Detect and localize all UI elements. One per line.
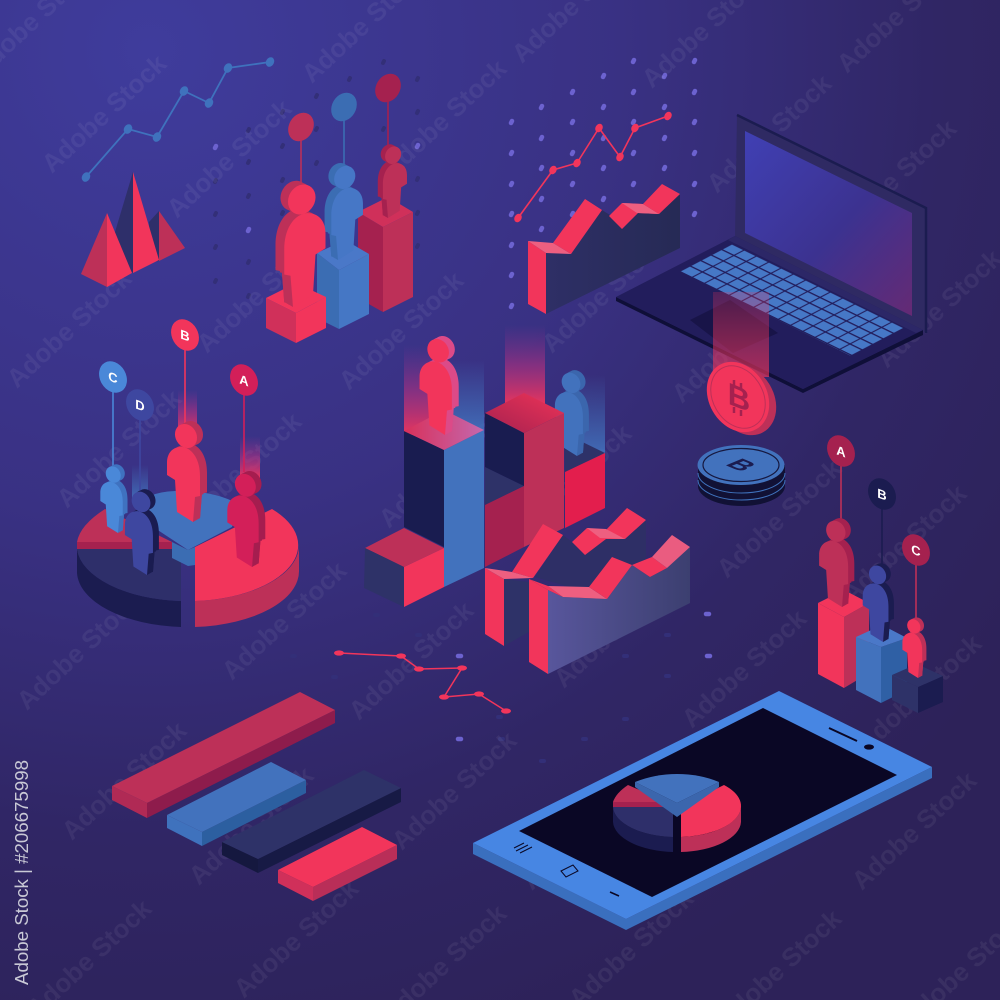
bar 3 xyxy=(222,770,401,873)
line chart: red, lower center xyxy=(334,650,511,714)
watermark: Adobe Stock xyxy=(11,585,148,716)
laptop screen xyxy=(745,131,912,316)
front chart xyxy=(529,535,690,674)
glow: blue beside left person xyxy=(445,360,484,432)
phone speaker and camera xyxy=(829,728,874,750)
person B with pin xyxy=(165,314,207,522)
laptop lid xyxy=(735,115,926,333)
watermark: Adobe Stock xyxy=(386,725,523,856)
watermark: Adobe Stock xyxy=(836,478,973,609)
phone buttons xyxy=(514,843,619,896)
person B with pin: B xyxy=(180,327,190,345)
dot grid: purple dots xyxy=(215,60,710,739)
line chart: blue, top left xyxy=(80,56,276,183)
person: red on tall block xyxy=(420,332,459,435)
person B with pin xyxy=(862,473,902,642)
glow: red above middle column xyxy=(505,325,545,405)
laptop trackpad xyxy=(690,300,778,353)
person D with pin: D xyxy=(135,397,145,415)
laptop keyboard xyxy=(680,244,904,356)
watermark: Adobe Stock xyxy=(701,68,838,199)
people on podiums, right xyxy=(818,430,943,713)
bar 1 xyxy=(112,692,335,818)
pyramid chart xyxy=(81,172,185,287)
person A with pin xyxy=(224,359,266,567)
people on podiums, top xyxy=(266,69,413,343)
watermark: Adobe Stock xyxy=(191,228,328,359)
person: red with pin xyxy=(275,108,326,307)
person C with pin xyxy=(93,356,133,533)
watermark: Adobe Stock xyxy=(516,765,653,896)
pie slice: blue xyxy=(135,491,240,566)
watermark: Adobe Stock xyxy=(333,265,470,396)
watermark: Adobe Stock xyxy=(846,765,983,896)
back chart xyxy=(535,508,646,590)
bar 4 xyxy=(278,827,397,901)
watermark: Adobe Stock xyxy=(501,418,638,549)
podium A xyxy=(818,590,869,688)
block: middle tall xyxy=(485,393,564,547)
person A with pin: A xyxy=(239,372,249,390)
watermark: Adobe Stock xyxy=(851,628,988,759)
watermark: Adobe Stock xyxy=(711,453,848,584)
watermark: Adobe Stock xyxy=(171,406,308,537)
watermark: Adobe Stock xyxy=(548,563,685,694)
bitcoin coin stack: blue xyxy=(698,445,785,506)
person C with pin xyxy=(896,529,936,678)
watermark: Adobe Stock xyxy=(51,383,188,514)
area charts: center front xyxy=(485,508,690,674)
center podium with people xyxy=(364,325,605,607)
phone body xyxy=(473,767,932,930)
phone screen xyxy=(519,708,897,897)
light beam from laptop xyxy=(713,292,769,377)
line chart: red, top xyxy=(513,110,673,224)
watermark: Adobe Stock xyxy=(536,228,673,359)
watermark: Adobe Stock xyxy=(161,93,298,224)
person: blue right xyxy=(555,367,589,456)
watermark: Adobe Stock xyxy=(373,403,510,534)
smartphone with pie chart xyxy=(473,691,932,930)
left small chart xyxy=(485,524,563,646)
person C with pin: C xyxy=(108,369,118,387)
laptop base xyxy=(616,297,923,393)
person: blue with pin xyxy=(324,88,363,260)
pie chart with people xyxy=(77,314,299,627)
person C with pin: C xyxy=(911,542,921,560)
mini pie chart xyxy=(613,774,741,852)
bitcoin coin: red: B xyxy=(728,376,750,419)
watermark: Adobe Stock xyxy=(376,53,513,184)
podium C xyxy=(892,664,943,713)
watermark: Adobe Stock xyxy=(216,555,353,686)
podium: blue xyxy=(317,240,369,329)
block: right low xyxy=(564,433,605,528)
person D with pin xyxy=(120,384,160,575)
podium: tall maroon xyxy=(358,197,413,312)
watermark: Adobe Stock xyxy=(36,48,173,179)
block: front low xyxy=(364,528,444,607)
block: tall left xyxy=(404,410,484,587)
watermark: Adobe Stock xyxy=(721,730,858,861)
area chart: top right ribbon xyxy=(528,184,680,314)
pie slice: red xyxy=(195,509,299,627)
watermark: Adobe Stock xyxy=(183,760,320,891)
podium B xyxy=(856,625,907,703)
watermark: Adobe Stock xyxy=(666,278,803,409)
laptop xyxy=(616,115,926,393)
pie slice: maroon xyxy=(77,509,172,549)
glow: blue around right person xyxy=(565,375,605,455)
watermark: Adobe Stock xyxy=(826,113,963,244)
bar 2 xyxy=(167,762,306,846)
person: maroon with pin xyxy=(370,69,407,218)
block: middle low xyxy=(485,467,524,567)
watermark: Adobe Stock xyxy=(676,603,813,734)
watermark: Adobe Stock xyxy=(1,263,138,394)
pie slice: dark xyxy=(77,549,181,627)
person A with pin xyxy=(819,430,861,607)
stock id number: Adobe Stock | #206675998 xyxy=(11,760,32,985)
bar chart: isometric bars xyxy=(112,692,401,901)
dot grid: dark dots xyxy=(215,61,669,761)
bitcoin coin: red xyxy=(694,350,789,447)
podium: red xyxy=(266,283,326,343)
watermark: Adobe Stock xyxy=(343,595,480,726)
bitcoin coin stack: blue: B xyxy=(719,455,764,474)
person B with pin: B xyxy=(877,486,887,504)
person A with pin: A xyxy=(836,443,846,461)
watermark: Adobe Stock xyxy=(56,715,193,846)
glow: red behind left person xyxy=(404,345,445,435)
watermark: Adobe Stock xyxy=(228,873,365,1000)
